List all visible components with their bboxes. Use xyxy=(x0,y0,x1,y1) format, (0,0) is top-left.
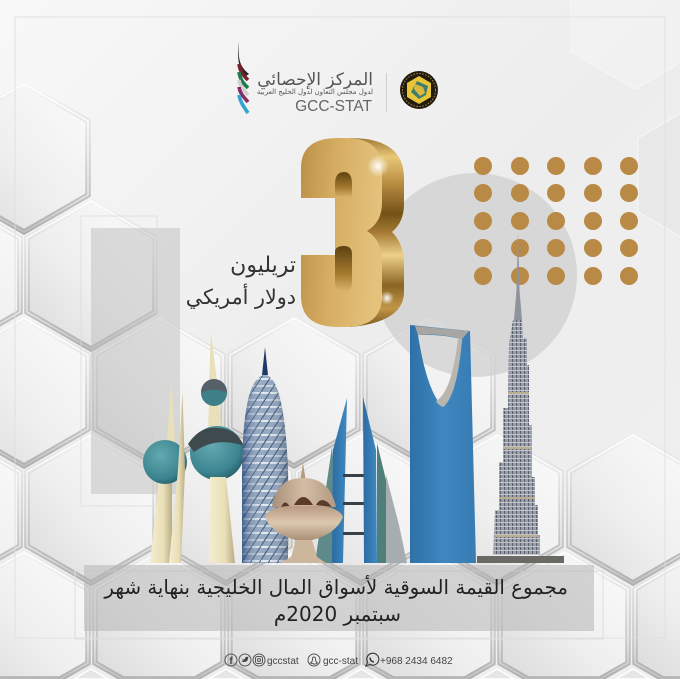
logo arabic subtitle: لدول مجلس التعاون لدول الخليج العربية xyxy=(257,88,373,96)
decorative grey rectangle xyxy=(91,228,180,494)
sky bridge rim xyxy=(415,326,469,339)
thin rectangle outline xyxy=(81,216,157,506)
phone number: +968 2434 6482 xyxy=(380,656,453,667)
burner finial xyxy=(300,463,306,482)
glint bottom xyxy=(380,291,394,305)
ball canopy xyxy=(188,428,244,452)
burner dome xyxy=(272,478,336,507)
big number 3 xyxy=(301,138,404,327)
logo divider xyxy=(386,73,387,112)
left sail blue xyxy=(332,398,347,563)
burner windows xyxy=(281,497,332,507)
spire xyxy=(514,232,522,320)
Kingdom Centre xyxy=(410,325,476,563)
handle: gccstat: gccstat xyxy=(267,656,299,667)
large ball xyxy=(190,426,244,480)
caption panel outline xyxy=(75,571,603,639)
logo latin name: GCC-STAT xyxy=(295,98,373,115)
icon: instagram xyxy=(253,654,265,666)
icon: GCC emblem xyxy=(400,71,438,109)
upper ball xyxy=(201,379,227,405)
large tower spike xyxy=(209,332,217,382)
dot grid xyxy=(474,157,638,285)
icon: whatsapp xyxy=(366,653,379,666)
small tower shaft xyxy=(150,478,172,563)
arch inner edge xyxy=(436,338,462,407)
second spike xyxy=(169,392,185,563)
landmarks skyline xyxy=(143,232,564,563)
caption panel fill xyxy=(84,565,594,631)
Oman incense burner xyxy=(265,463,343,563)
3 front face xyxy=(301,138,382,327)
tower body xyxy=(493,320,540,555)
caption line 1: مجموع القيمة السوقية لأسواق المال الخليجية بنهاية شهر xyxy=(103,575,568,599)
trillion: تريليون xyxy=(230,253,296,278)
caption panel xyxy=(75,565,603,639)
Burj Khalifa xyxy=(477,232,564,563)
Kuwait Towers xyxy=(143,332,244,563)
small tower spike xyxy=(167,378,175,442)
icon: snapchat xyxy=(308,654,320,666)
logo ribbon xyxy=(238,42,249,113)
setback bands xyxy=(495,392,538,537)
logo arabic name: المركز الإحصائي xyxy=(257,70,373,90)
footer contacts xyxy=(225,653,453,667)
logo block xyxy=(238,42,438,115)
US dollar: دولار أمريكي xyxy=(186,283,296,309)
Bahrain World Trade Center xyxy=(315,397,407,563)
right sail blue xyxy=(363,397,377,563)
3 side extrusion xyxy=(350,138,404,327)
amount label xyxy=(186,253,296,309)
Doha Tower xyxy=(242,347,288,563)
3 upper counter xyxy=(335,172,352,198)
left sail glass xyxy=(315,447,343,563)
caption line 2: سبتمبر 2020م xyxy=(274,602,401,626)
small sphere xyxy=(143,440,187,484)
icon: twitter xyxy=(239,654,251,666)
grey circle xyxy=(373,173,577,377)
icon: facebook xyxy=(225,654,237,667)
base podium xyxy=(477,556,564,563)
glint top xyxy=(367,155,389,177)
burner stem xyxy=(280,540,326,563)
large tower shaft xyxy=(209,477,235,563)
right sail glass xyxy=(377,443,386,563)
right sail grey xyxy=(386,475,407,563)
3 lower counter xyxy=(335,246,352,292)
handle: gcc-stat: gcc-stat xyxy=(323,656,358,667)
bridges xyxy=(343,474,364,535)
icon: facebook: f xyxy=(229,656,233,667)
burner bowl xyxy=(265,506,343,540)
